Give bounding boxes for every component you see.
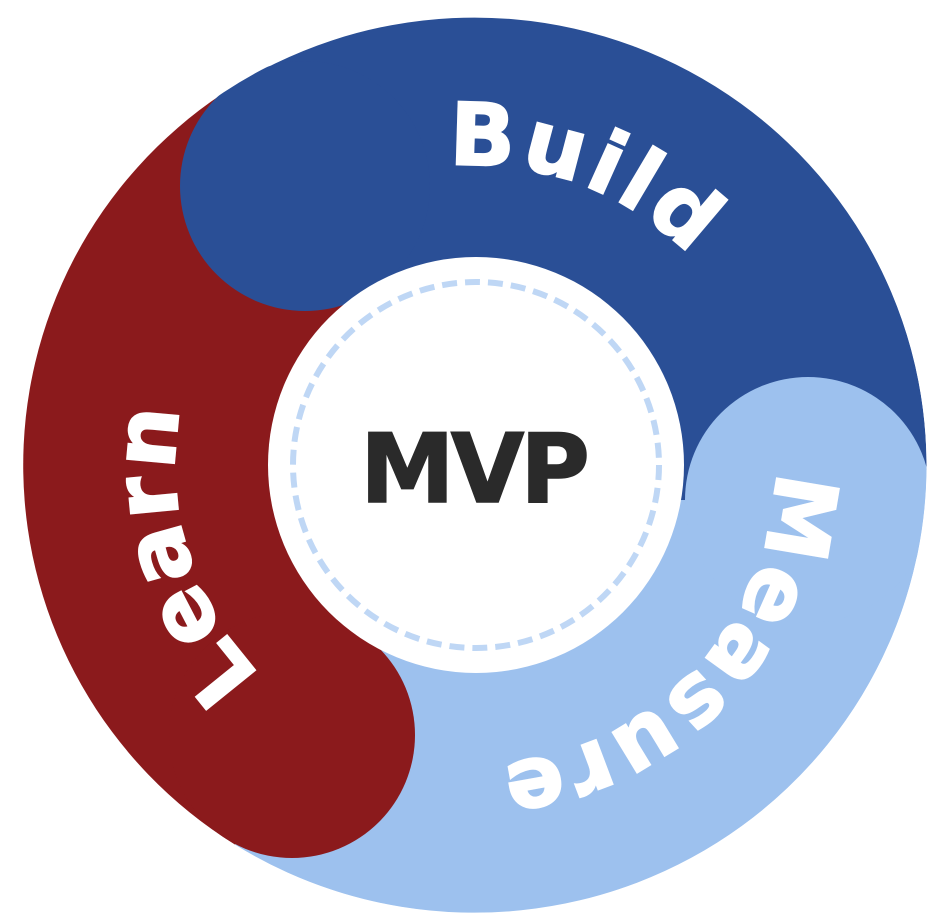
segment: measure (light blue) bbox=[235, 377, 931, 913]
label: Learn: Learn bbox=[126, 412, 256, 711]
dashed ring bbox=[293, 282, 659, 648]
center hub bbox=[268, 257, 684, 673]
center label: MVP: MVP bbox=[360, 415, 586, 525]
segment: build (dark blue) bbox=[180, 18, 927, 500]
label: Build: Build bbox=[456, 100, 728, 252]
segment: learn (red) bbox=[23, 97, 344, 844]
red cap overlapping measure bbox=[217, 640, 415, 858]
label: Measure: Measure bbox=[508, 477, 840, 809]
